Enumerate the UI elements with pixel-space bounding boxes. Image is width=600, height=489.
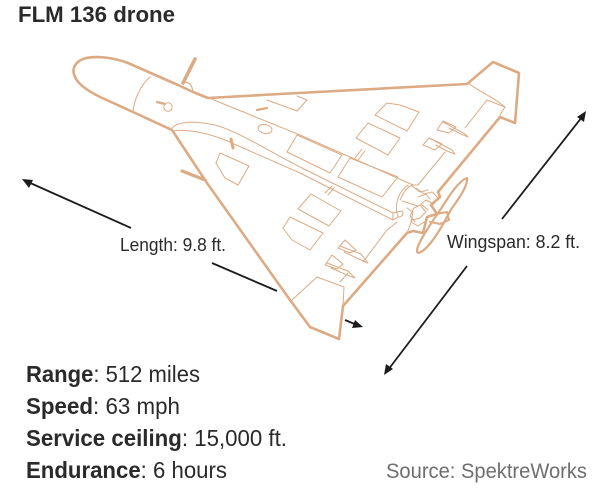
icon: upper fin xyxy=(183,59,195,83)
spec: speed: Speed: 63 mph xyxy=(26,393,180,419)
icon: propeller hub xyxy=(427,212,449,224)
arrow: wingspan, lower xyxy=(384,266,467,375)
drone airframe outline xyxy=(73,57,519,339)
arrow: length, lower xyxy=(212,263,363,328)
spec: endurance: Endurance: 6 hours xyxy=(26,457,227,483)
spec: service ceiling: Service ceiling: 15,000 ft. xyxy=(26,425,287,451)
icon: lower fin xyxy=(182,171,205,180)
fuselage and wing details xyxy=(133,77,505,306)
source: Source: SpektreWorks xyxy=(386,459,587,483)
wingspan label: Wingspan: 8.2 ft. xyxy=(447,232,580,252)
spec: range: Range: 512 miles xyxy=(26,361,200,387)
arrow: wingspan, upper xyxy=(502,111,586,219)
title: FLM 136 drone xyxy=(18,2,175,27)
length label: Length: 9.8 ft. xyxy=(120,235,226,255)
drone illustration xyxy=(73,57,519,339)
icon: propeller xyxy=(417,178,467,253)
arrow: length, upper xyxy=(22,179,131,228)
icon: fin base xyxy=(183,82,193,92)
